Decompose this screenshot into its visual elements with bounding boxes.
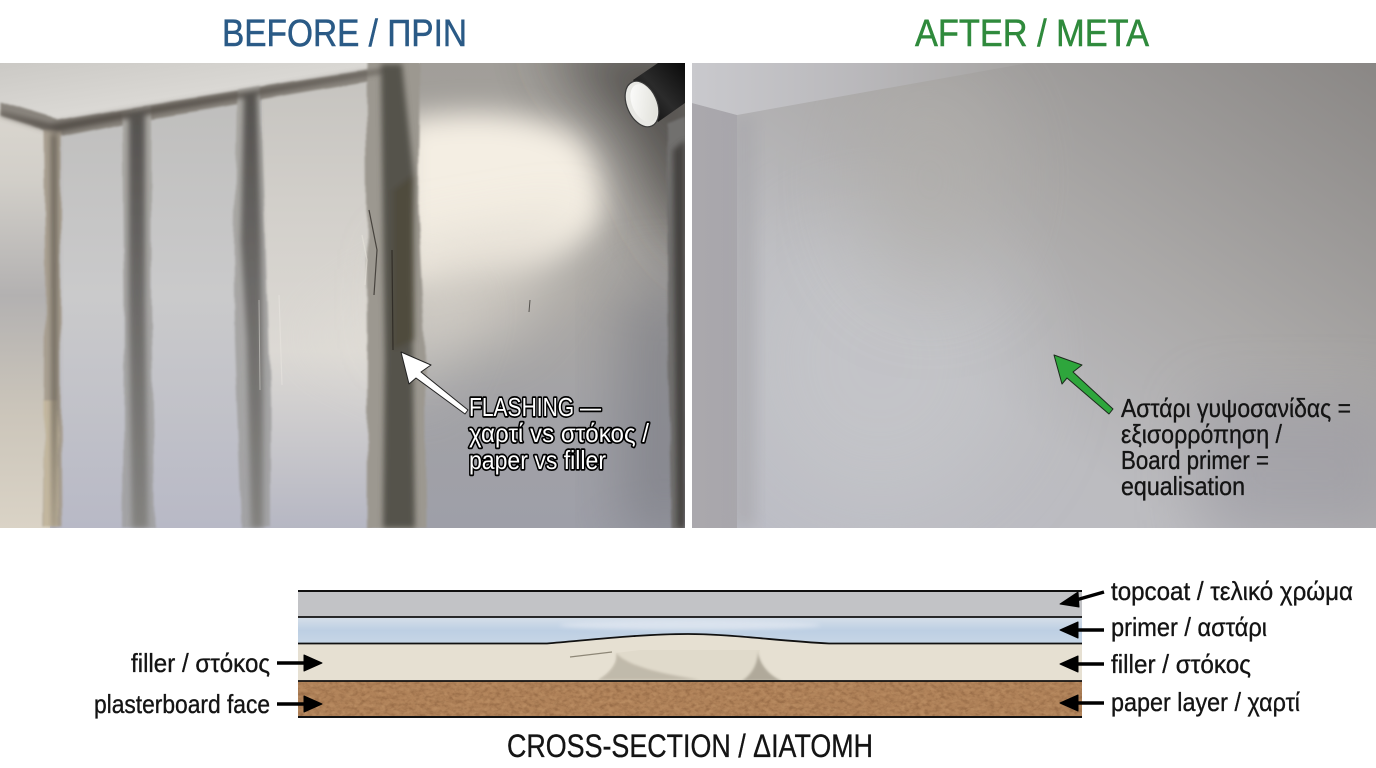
- layer: filler: [298, 634, 1082, 681]
- labels: cross-section right: [1111, 576, 1353, 717]
- labels: cross-section left: plasterboard face: [94, 689, 270, 719]
- arrows: cross-section left: [277, 655, 322, 712]
- callout: primer equalisation: Αστάρι γυψοσανίδας =: [1121, 393, 1351, 423]
- shade around lamp and lower right: [530, 63, 685, 528]
- arrow: flashing: [401, 352, 468, 414]
- title: before: BEFORE / ΠΡΙΝ: [222, 13, 467, 55]
- labels: cross-section right: filler / στόκος: [1111, 649, 1251, 679]
- panel: before photo: [0, 63, 685, 528]
- labels: cross-section left: [94, 648, 270, 719]
- light beam: [416, 96, 620, 394]
- labels: cross-section right: topcoat / τελικό χρώμα: [1111, 576, 1353, 606]
- callout: flashing: paper vs filler: [469, 445, 606, 475]
- icon: spotlight lamp: [624, 63, 685, 128]
- caption: cross-section: CROSS-SECTION / ΔΙΑΤΟΜΗ: [507, 728, 873, 764]
- seams: [0, 62, 685, 528]
- left wall: [692, 103, 737, 528]
- labels: cross-section right: paper layer / χαρτί: [1111, 687, 1300, 717]
- callout: primer equalisation: Board primer =: [1121, 445, 1269, 475]
- layer: topcoat: [298, 590, 1082, 617]
- callout: primer equalisation: εξισορρόπηση /: [1121, 419, 1283, 449]
- callout: flashing: FLASHING —: [469, 392, 601, 422]
- callout: primer equalisation: equalisation: [1121, 471, 1245, 501]
- chart: cross-section layers: [298, 590, 1082, 718]
- layer: primer: [298, 617, 1082, 644]
- layer: paper: [298, 681, 1082, 718]
- callout: primer equalisation: [1121, 393, 1351, 501]
- layer lines: [298, 591, 1082, 717]
- arrows: cross-section right: [1060, 592, 1104, 711]
- ceiling: [0, 63, 420, 120]
- ceiling: [692, 63, 982, 115]
- panel: after photo: [692, 63, 1376, 540]
- arrow: equalisation: [1054, 355, 1113, 414]
- filler seam detail: [570, 650, 782, 681]
- callout: flashing: χαρτί vs στόκος /: [469, 418, 650, 448]
- title: after: AFTER / META: [915, 13, 1150, 55]
- callout: flashing: [469, 392, 650, 475]
- labels: cross-section right: primer / αστάρι: [1111, 612, 1267, 642]
- labels: cross-section left: filler / στόκος: [131, 648, 270, 678]
